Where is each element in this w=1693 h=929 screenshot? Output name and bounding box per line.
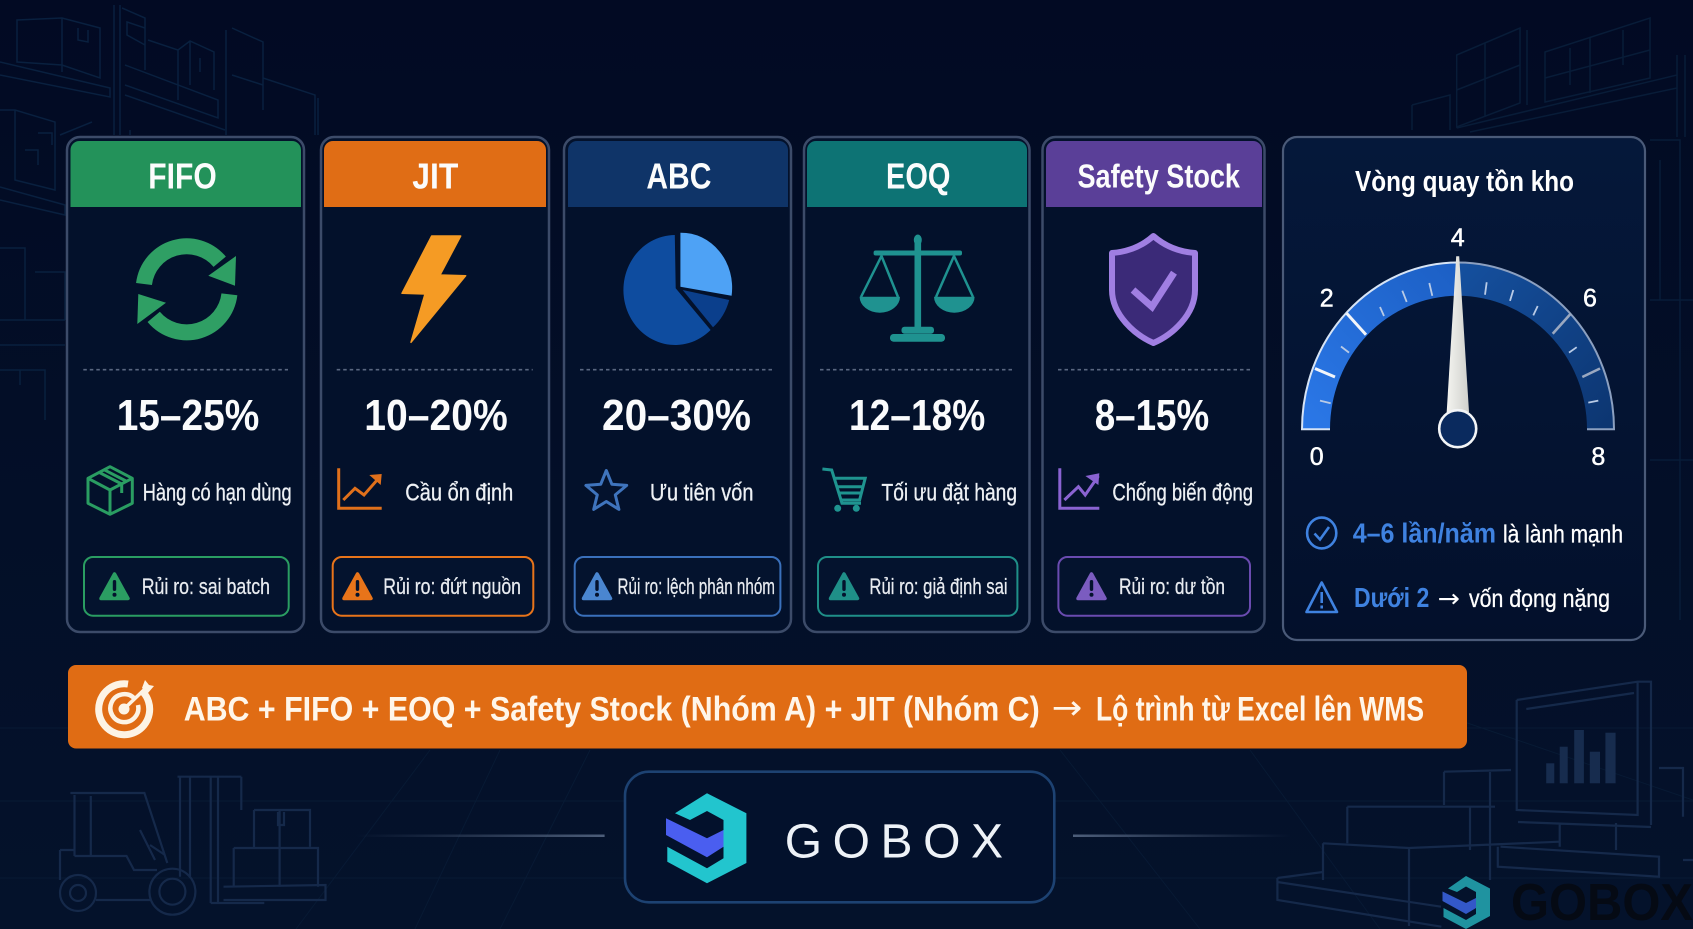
- figure: 12–18%: 12–18%: [849, 391, 985, 440]
- icon: trend chart: [339, 468, 382, 508]
- risk box: Rủi ro: lệch phân nhóm: [618, 574, 775, 599]
- note: healthy turnover: 4–6 lần/năm: [1353, 518, 1496, 549]
- icon: cycle arrows: [137, 246, 236, 332]
- note: low turnover: [1306, 582, 1610, 613]
- figure: 8–15%: 8–15%: [1095, 391, 1209, 440]
- label: use case: Chống biến động: [1112, 480, 1253, 507]
- icon: trend chart: [1060, 468, 1099, 508]
- risk box: Rủi ro: sai batch: [142, 574, 270, 599]
- header: FIFO: [70, 141, 301, 207]
- icon: shield: [1112, 236, 1195, 343]
- note: low turnover: Dưới 2: [1354, 582, 1429, 613]
- risk box: Rủi ro: dư tồn: [1119, 574, 1225, 599]
- header: FIFO: FIFO: [148, 155, 217, 196]
- note: healthy turnover: là lành mạnh: [1503, 521, 1623, 549]
- logo plate: GOBOX: [625, 772, 1054, 902]
- risk box: [818, 557, 1017, 616]
- icon: GOBOX logo: [666, 793, 746, 883]
- note: healthy turnover: [1307, 518, 1623, 549]
- icon: monitor and boxes line art: [1277, 682, 1693, 927]
- icon: warning: [101, 574, 128, 598]
- heading: Vòng quay tồn kho: [1355, 166, 1574, 198]
- gauge chart: [1302, 224, 1614, 471]
- risk box: [333, 557, 533, 616]
- note: low turnover: vốn đọng nặng: [1469, 585, 1610, 613]
- panel: FIFO: [67, 137, 304, 632]
- panel: ABC: [564, 137, 791, 632]
- label: use case: Cầu ổn định: [405, 480, 513, 507]
- header: ABC: ABC: [646, 155, 711, 196]
- header: Safety Stock: Safety Stock: [1078, 158, 1241, 195]
- scale labels: 2: [1320, 285, 1334, 313]
- needle: [1447, 256, 1469, 412]
- wordmark: GOBOX: [785, 815, 1003, 868]
- figure: 20–30%: 20–30%: [602, 391, 751, 440]
- panel: JIT: [321, 137, 549, 632]
- label: use case: Tối ưu đặt hàng: [882, 480, 1017, 507]
- scale labels: 8: [1591, 443, 1605, 471]
- header: Safety Stock: [1046, 141, 1262, 207]
- header: JIT: JIT: [412, 155, 458, 196]
- icon: warning: [584, 574, 610, 598]
- header: ABC: [568, 141, 788, 207]
- icon: target: [99, 680, 154, 735]
- needle hub: [1439, 410, 1476, 447]
- panel: EOQ: [804, 137, 1030, 632]
- icon: check circle: [1307, 518, 1336, 548]
- note: low turnover: →: [1438, 584, 1460, 613]
- banner text: →: [1052, 688, 1082, 728]
- warehouse line art: top right: [1412, 18, 1693, 620]
- icon: star: [586, 470, 627, 509]
- warehouse line art: top left: [0, 5, 318, 420]
- icon: warning: [830, 574, 858, 598]
- label: use case: Ưu tiên vốn: [650, 480, 753, 507]
- label: use case: Hàng có hạn dùng: [143, 480, 292, 507]
- banner text: Lộ trình từ Excel lên WMS: [1096, 691, 1424, 729]
- icon: balance scale: [860, 234, 975, 342]
- icon: forklift line art: [60, 777, 326, 915]
- icon: shopping cart: [822, 469, 865, 512]
- header: EOQ: EOQ: [886, 155, 950, 196]
- icon: box: [88, 467, 132, 514]
- banner: recommended combination: [68, 665, 1467, 748]
- header: JIT: [324, 141, 546, 207]
- icon: warning: [344, 574, 371, 598]
- figure: 10–20%: 10–20%: [364, 391, 508, 440]
- banner text: ABC + FIFO + EOQ + Safety Stock (Nhóm A) + JIT (Nhóm C): [184, 691, 1040, 729]
- header: EOQ: [807, 141, 1027, 207]
- risk box: [1058, 557, 1250, 616]
- scale labels: 4: [1451, 224, 1465, 252]
- scale labels: 6: [1583, 285, 1597, 313]
- panel: inventory turnover gauge: [1283, 137, 1645, 640]
- risk box: [84, 557, 289, 616]
- icon: warning: [1078, 574, 1105, 598]
- icon: pie chart: [623, 233, 732, 345]
- figure: 15–25%: 15–25%: [117, 391, 259, 440]
- risk box: [575, 557, 780, 616]
- risk box: Rủi ro: đứt nguồn: [383, 574, 521, 599]
- icon: lightning bolt: [402, 236, 466, 342]
- panel: Safety Stock: [1042, 137, 1264, 632]
- risk box: Rủi ro: giả định sai: [869, 574, 1008, 599]
- icon: warning outline: [1306, 582, 1337, 612]
- scale labels: 0: [1310, 443, 1324, 471]
- scale labels: [1310, 224, 1605, 471]
